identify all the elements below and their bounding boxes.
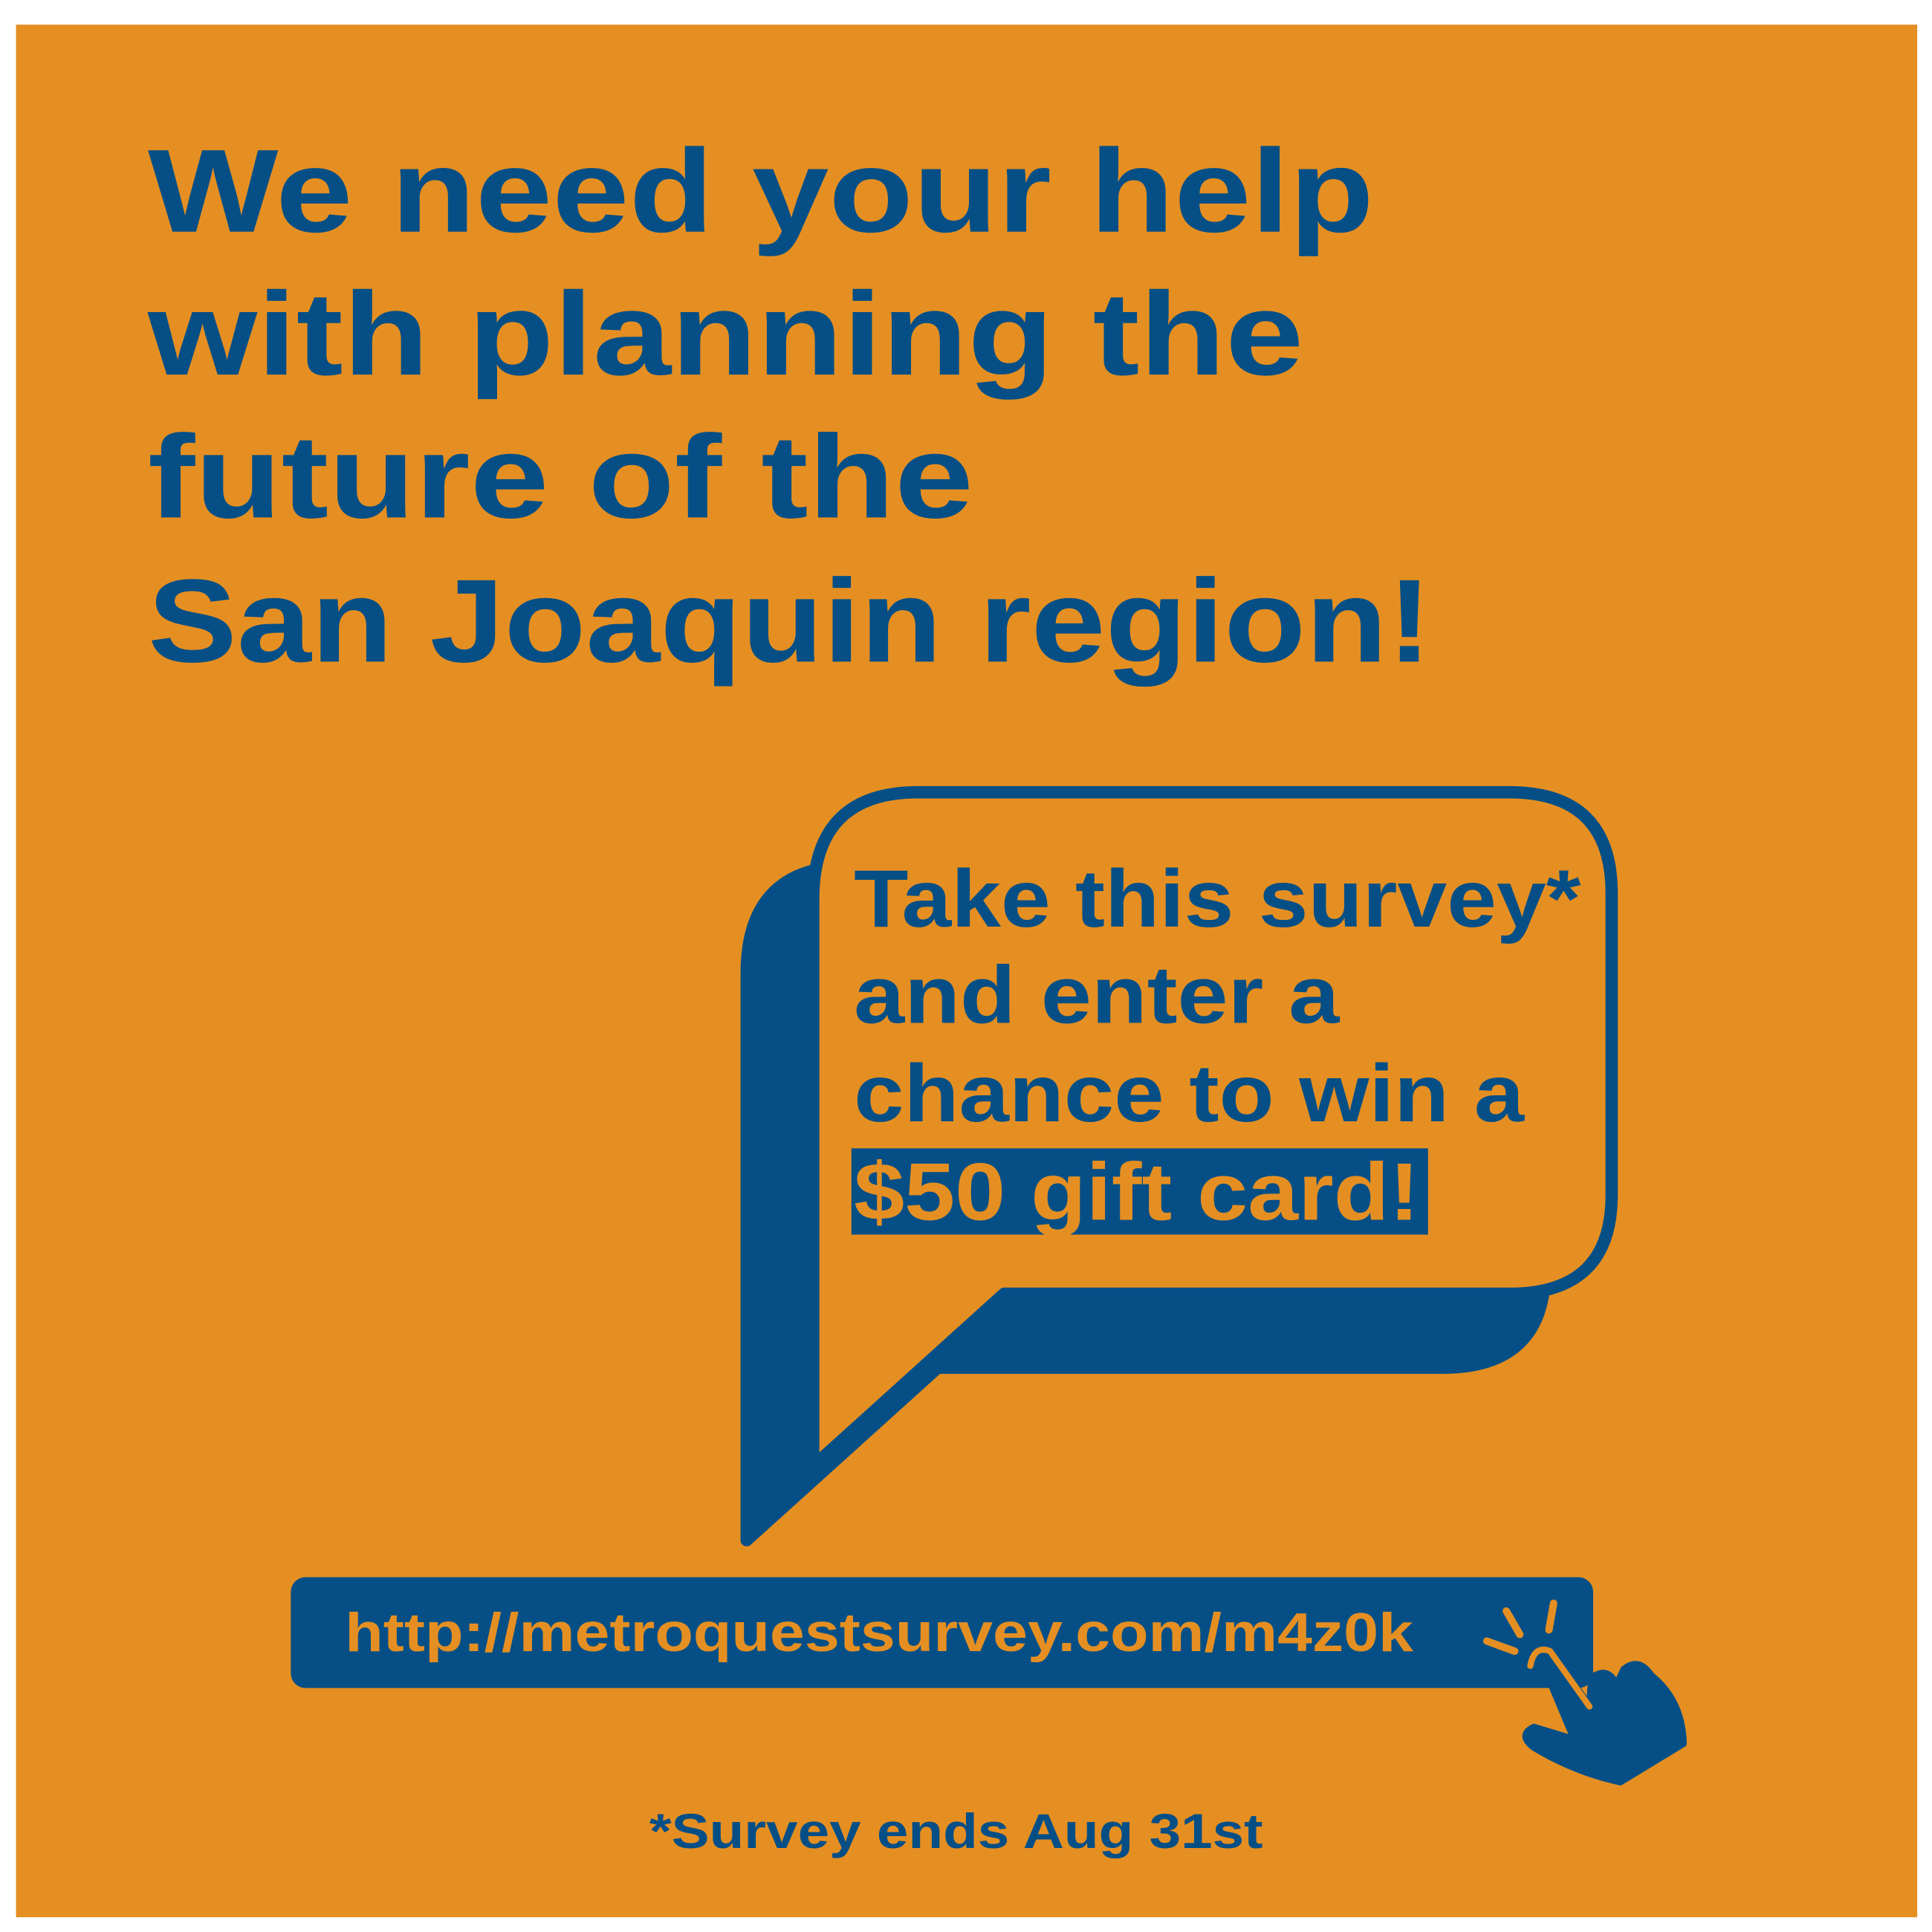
gift card highlight: $50 gift card! <box>854 1147 1419 1238</box>
url bar: http://metroquestsurvey.com/m4z0k <box>345 1603 1413 1663</box>
bubble text <box>854 854 1581 1139</box>
bubble text: Take this survey* <box>854 854 1581 944</box>
footnote: *Survey ends Aug 31st <box>649 1804 1263 1859</box>
title: We need your help <box>148 125 1374 257</box>
title: with planning the <box>147 268 1303 400</box>
sparkles <box>1477 1632 1524 1661</box>
bubble text: chance to win a <box>854 1048 1525 1139</box>
bubble shadow <box>747 866 1545 1540</box>
bubble outline <box>813 792 1612 1466</box>
speech bubble <box>747 792 1612 1540</box>
title <box>147 125 1432 687</box>
index finger <box>1530 1650 1589 1707</box>
icon: pointing hand <box>1477 1595 1683 1782</box>
title: future of the <box>148 410 973 542</box>
bubble text: and enter a <box>854 950 1341 1040</box>
title: San Joaquin region! <box>148 554 1432 687</box>
url bar <box>291 1577 1593 1688</box>
hand <box>1526 1644 1683 1782</box>
